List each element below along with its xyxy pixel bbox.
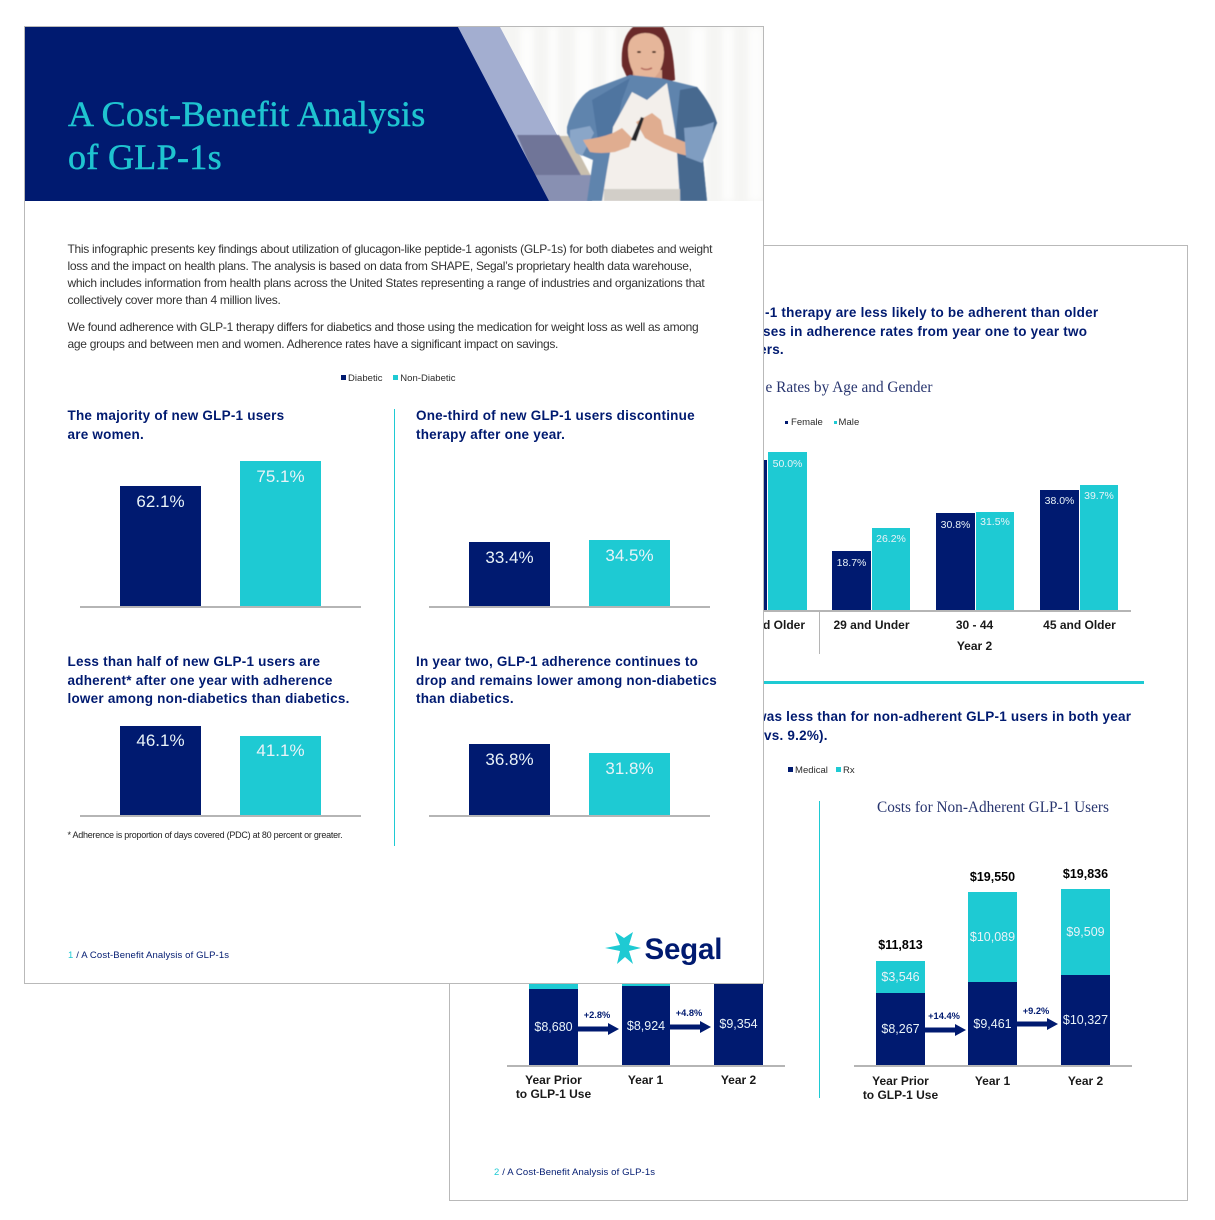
heading: cost finding xyxy=(756,709,1131,743)
heading: year two adherence: drop and remains lower among non-diabetics xyxy=(416,672,717,688)
footer: front page: 1 / A Cost-Benefit Analysis of GLP-1s xyxy=(68,950,229,961)
bar chart: adherence rates by age and gender, year 2: 39.7% xyxy=(1084,490,1114,502)
bar chart: costs for non-adherent users: $8,267 xyxy=(881,1022,920,1036)
logo: Segal xyxy=(605,932,722,966)
bar chart: adherence in year two xyxy=(429,744,710,817)
text block: introduction: collectively cover more than 4 million lives. xyxy=(68,292,281,306)
title: of GLP-1s xyxy=(68,137,222,177)
bar chart: adherence after one year: 46.1% xyxy=(136,731,185,750)
bar chart: adherence rates by age and gender, year 2: Year 2 xyxy=(957,639,992,653)
label: +4.8%: +4.8% xyxy=(676,1008,702,1018)
bar chart: costs for non-adherent users: $11,813 xyxy=(878,938,923,952)
heading: majority women: are women. xyxy=(68,426,144,442)
bar chart: adherence rates by age and gender, year 2: 38.0% xyxy=(1045,495,1074,507)
bar chart: adherence in year two: 31.8% xyxy=(605,759,654,778)
heading: majority women: The majority of new GLP-1 users xyxy=(68,408,284,423)
text block: findings summary: We found adherence with GLP-1 therapy differs for diabetics and those using the medication for weight loss as well as among xyxy=(68,320,698,334)
heading: less than half adherent: adherent* after one year with adherence xyxy=(68,672,333,688)
bar chart: adherence after one year xyxy=(80,726,361,817)
heading: less than half adherent xyxy=(68,654,350,706)
bar chart: new users by gender xyxy=(80,461,361,608)
bar chart: costs for non-adherent users: Year 1 xyxy=(975,1074,1010,1088)
bar chart: adherence rates by age and gender, year 2: 30 - 44 xyxy=(956,618,993,632)
bar chart: adherence rates by age and gender, year 2: 50.0% xyxy=(773,458,802,470)
photo: woman with injection pen xyxy=(567,27,717,201)
bar chart: discontinuation after one year: 33.4% xyxy=(485,548,534,567)
heading: adherence by age finding: ses in adherence rates from year one to year two xyxy=(763,324,1087,338)
bar chart: new users by gender: 62.1% xyxy=(136,492,185,511)
legend: medical and rx: Medical Rx xyxy=(795,765,855,776)
title: A Cost-Benefit Analysis xyxy=(68,94,426,134)
bar chart: discontinuation after one year: 34.5% xyxy=(605,546,654,565)
legend: diabetic and non-diabetic: Diabetic Non-Diabetic xyxy=(348,373,456,384)
arrow: year prior to year 1 xyxy=(925,1024,966,1036)
bar chart: adherence rates by age and gender, year 2: d Older xyxy=(763,618,805,632)
bar chart: costs for non-adherent users: $10,089 xyxy=(970,930,1015,944)
panel: back page xyxy=(449,245,1188,1201)
bar chart: costs for adherent users: Year 2 xyxy=(721,1073,756,1087)
divider: between columns xyxy=(394,409,395,846)
bar chart: adherence rates by age and gender, year 2: 31.5% xyxy=(980,516,1010,528)
heading: less than half adherent: lower among non-diabetics than diabetics. xyxy=(68,691,350,706)
label: +9.2%: +9.2% xyxy=(1023,1006,1049,1016)
divider: section rule xyxy=(760,681,1144,684)
bar chart: adherence rates by age and gender, year 2: 45 and Older xyxy=(1043,618,1116,632)
text block: findings summary xyxy=(68,320,698,350)
bar chart: costs for non-adherent users: $19,836 xyxy=(1063,867,1108,881)
bar chart: costs for non-adherent users xyxy=(854,867,1132,1102)
bar chart: new users by gender: 75.1% xyxy=(256,467,305,486)
bar chart: costs for non-adherent users: $3,546 xyxy=(881,970,920,984)
bar chart: costs for non-adherent users: Year 2 xyxy=(1068,1074,1103,1088)
bar chart: adherence rates by age and gender, year 2: 29 and Under xyxy=(833,618,910,632)
heading: adherence by age finding: ers. xyxy=(759,342,784,357)
bar chart: costs for adherent users: $9,354 xyxy=(719,1017,758,1031)
heading: cost finding: was less than for non-adherent GLP-1 users in both year xyxy=(756,709,1131,724)
arrow: year prior to year 1 xyxy=(578,1023,619,1035)
bar chart: costs for adherent users: $8,680 xyxy=(534,1020,573,1034)
label: +14.4%: +14.4% xyxy=(928,1011,960,1021)
text block: introduction: loss and the impact on health plans. The analysis is based on data from SHAPE, Segal’s proprietary health data warehouse, xyxy=(68,258,692,272)
heading: year two adherence: than diabetics. xyxy=(416,691,514,706)
text block: introduction: which includes information from health plans across the United States representing a range of industries and organizations that xyxy=(68,276,704,290)
heading: one-third discontinue: therapy after one year. xyxy=(416,426,565,442)
heading: adherence rates chart title: e Rates by Age and Gender xyxy=(766,378,932,396)
bar chart: adherence rates by age and gender, year 2: 30.8% xyxy=(941,519,970,531)
bar chart: adherence in year two: 36.8% xyxy=(485,750,534,769)
text block: introduction: This infographic presents key findings about utilization of glucagon-like peptide-1 agonists (GLP-1s) for both diabetes and weight xyxy=(68,242,712,256)
heading: adherence by age finding: -1 therapy are less likely to be adherent than older xyxy=(765,305,1098,320)
arrow: year 1 to year 2 xyxy=(1017,1018,1058,1030)
heading: adherence by age finding xyxy=(759,305,1098,357)
bar chart: costs for adherent users xyxy=(507,984,785,1101)
bar chart: costs for non-adherent users: $10,327 xyxy=(1063,1013,1108,1027)
title xyxy=(68,94,426,177)
heading: cost finding: vs. 9.2%). xyxy=(764,728,828,742)
bar chart: costs for non-adherent users: to GLP-1 Use xyxy=(863,1088,938,1102)
panel: front page xyxy=(24,26,764,984)
heading: year two adherence xyxy=(416,654,717,706)
photo: sofa xyxy=(517,135,592,201)
heading: less than half adherent: Less than half of new GLP-1 users are xyxy=(68,654,320,669)
bar chart: costs for non-adherent users: $19,550 xyxy=(970,870,1015,884)
bar chart: costs for adherent users: Year Prior xyxy=(525,1073,582,1087)
bar chart: adherence rates by age and gender, year 2: 26.2% xyxy=(876,533,906,545)
bar chart: costs for adherent users: $8,924 xyxy=(627,1019,665,1033)
bar chart: costs for non-adherent users: $9,509 xyxy=(1066,925,1105,939)
band: navy diagonal xyxy=(25,27,549,201)
bar chart: adherence rates by age and gender, year 2 xyxy=(763,452,1131,654)
bar chart: costs for adherent users: Year 1 xyxy=(628,1073,663,1087)
icon: star xyxy=(605,932,641,964)
bar chart: costs for non-adherent users: Year Prior xyxy=(872,1074,929,1088)
heading: one-third discontinue: One-third of new GLP-1 users discontinue xyxy=(416,408,695,423)
arrow: year 1 to year 2 xyxy=(670,1021,711,1033)
text block: introduction xyxy=(68,242,712,306)
heading: year two adherence: In year two, GLP-1 adherence continues to xyxy=(416,654,698,669)
label: +2.8%: +2.8% xyxy=(584,1010,610,1020)
heading: non-adherent costs chart title: Costs for Non-Adherent GLP-1 Users xyxy=(877,799,1109,816)
legend: female and male: Female Male xyxy=(791,417,859,428)
wordmark: Segal xyxy=(644,932,722,966)
band: translucent diagonal xyxy=(458,27,592,201)
bar chart: costs for adherent users: to GLP-1 Use xyxy=(516,1087,591,1101)
bar chart: adherence rates by age and gender, year 2: 18.7% xyxy=(837,557,866,569)
bar chart: costs for non-adherent users: $9,461 xyxy=(973,1017,1012,1031)
header banner with photo xyxy=(25,27,763,201)
divider: between cost charts xyxy=(819,801,820,1098)
text block: findings summary: age groups and between men and women. Adherence rates have a significant impact on savings. xyxy=(68,336,558,350)
bar chart: discontinuation after one year xyxy=(429,540,710,608)
bar chart: adherence after one year: 41.1% xyxy=(256,741,305,760)
footer: back page: 2 / A Cost-Benefit Analysis of GLP-1s xyxy=(494,1167,655,1178)
heading: one-third discontinue xyxy=(416,408,695,442)
footnote: * Adherence is proportion of days covered (PDC) at 80 percent or greater. xyxy=(68,830,342,840)
heading: majority women xyxy=(68,408,284,442)
